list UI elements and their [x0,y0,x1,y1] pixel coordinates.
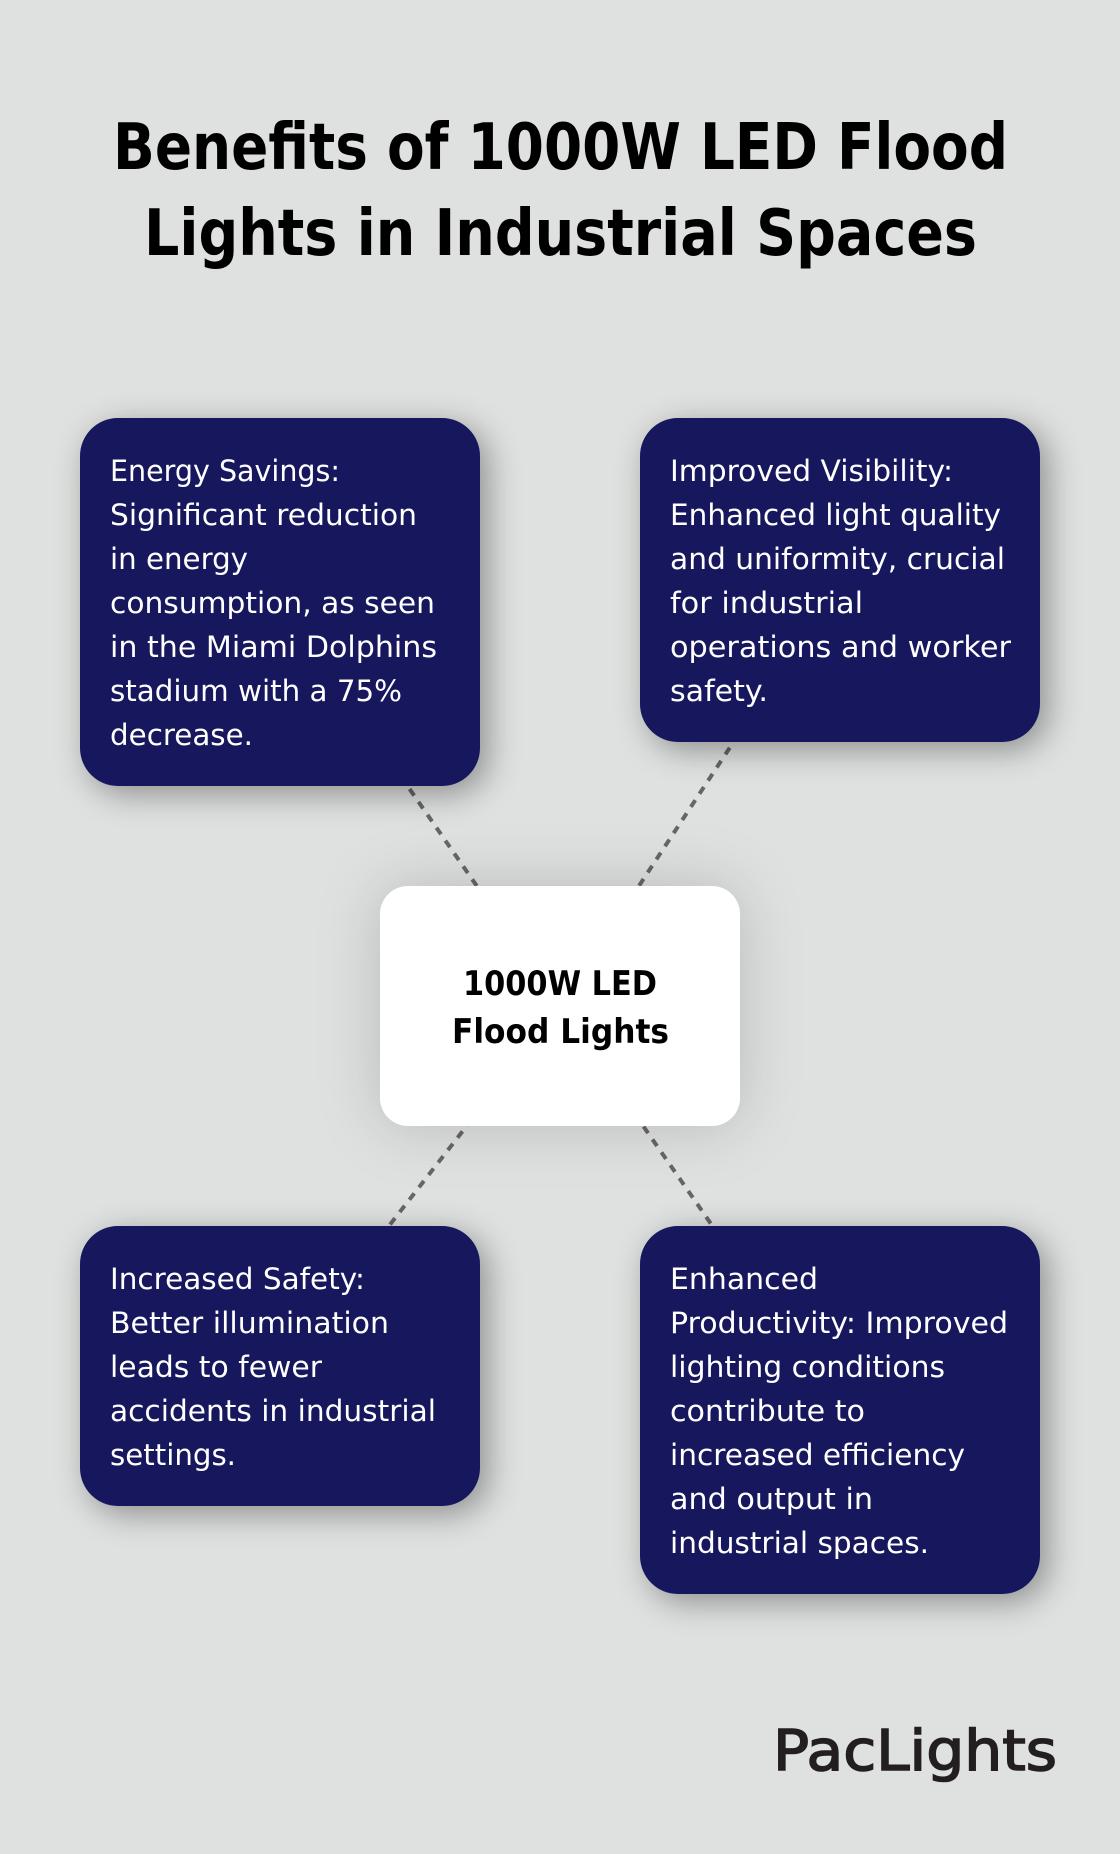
panel: enhanced productivity [640,1226,1040,1594]
panel: increased safety: accidents in industrial [110,1394,436,1428]
panel: energy savings: Significant reduction [110,498,417,532]
panel: centre node: Flood Lights [452,1012,669,1052]
connector: energy savings to centre [280,602,560,1006]
title: Lights in Industrial Spaces [144,197,977,271]
connector: increased safety to centre [280,1006,560,1366]
panel: increased safety: settings. [110,1438,236,1472]
panel: energy savings: in the Miami Dolphins [110,630,437,664]
panel: improved visibility [640,418,1040,742]
panel: energy savings: in energy [110,542,248,576]
panel: improved visibility: for industrial [670,586,863,620]
panel: improved visibility: safety. [670,674,768,708]
panel: enhanced productivity: and output in [670,1482,873,1516]
panel: increased safety [80,1226,480,1506]
title [113,111,1008,271]
panel: energy savings: Energy Savings: [110,454,340,488]
panel: improved visibility: Enhanced light quality [670,498,1001,532]
panel: improved visibility: and uniformity, crucial [670,542,1005,576]
panel: enhanced productivity: Productivity: Improved [670,1306,1008,1340]
panel: energy savings: stadium with a 75% [110,674,402,708]
panel: increased safety: Increased Safety: [110,1262,365,1296]
logo: PacLights: PacLights [773,1719,1057,1784]
panel: energy savings [80,418,480,786]
panel: energy savings: decrease. [110,718,253,752]
connector: improved visibility to centre [560,580,840,1006]
panel: improved visibility: Improved Visibility: [670,454,953,488]
connector: enhanced productivity to centre [560,1006,840,1410]
panel: increased safety: leads to fewer [110,1350,323,1384]
panel: increased safety: Better illumination [110,1306,389,1340]
panel: energy savings: consumption, as seen [110,586,435,620]
panel: centre node [380,886,740,1126]
panel: enhanced productivity: contribute to [670,1394,865,1428]
panel: enhanced productivity: lighting conditions [670,1350,945,1384]
panel: improved visibility: operations and worker [670,630,1012,664]
panel: enhanced productivity: Enhanced [670,1262,818,1296]
panel: enhanced productivity: increased efficiency [670,1438,965,1472]
panel: centre node: 1000W LED [463,964,657,1004]
panel: enhanced productivity: industrial spaces. [670,1526,929,1560]
